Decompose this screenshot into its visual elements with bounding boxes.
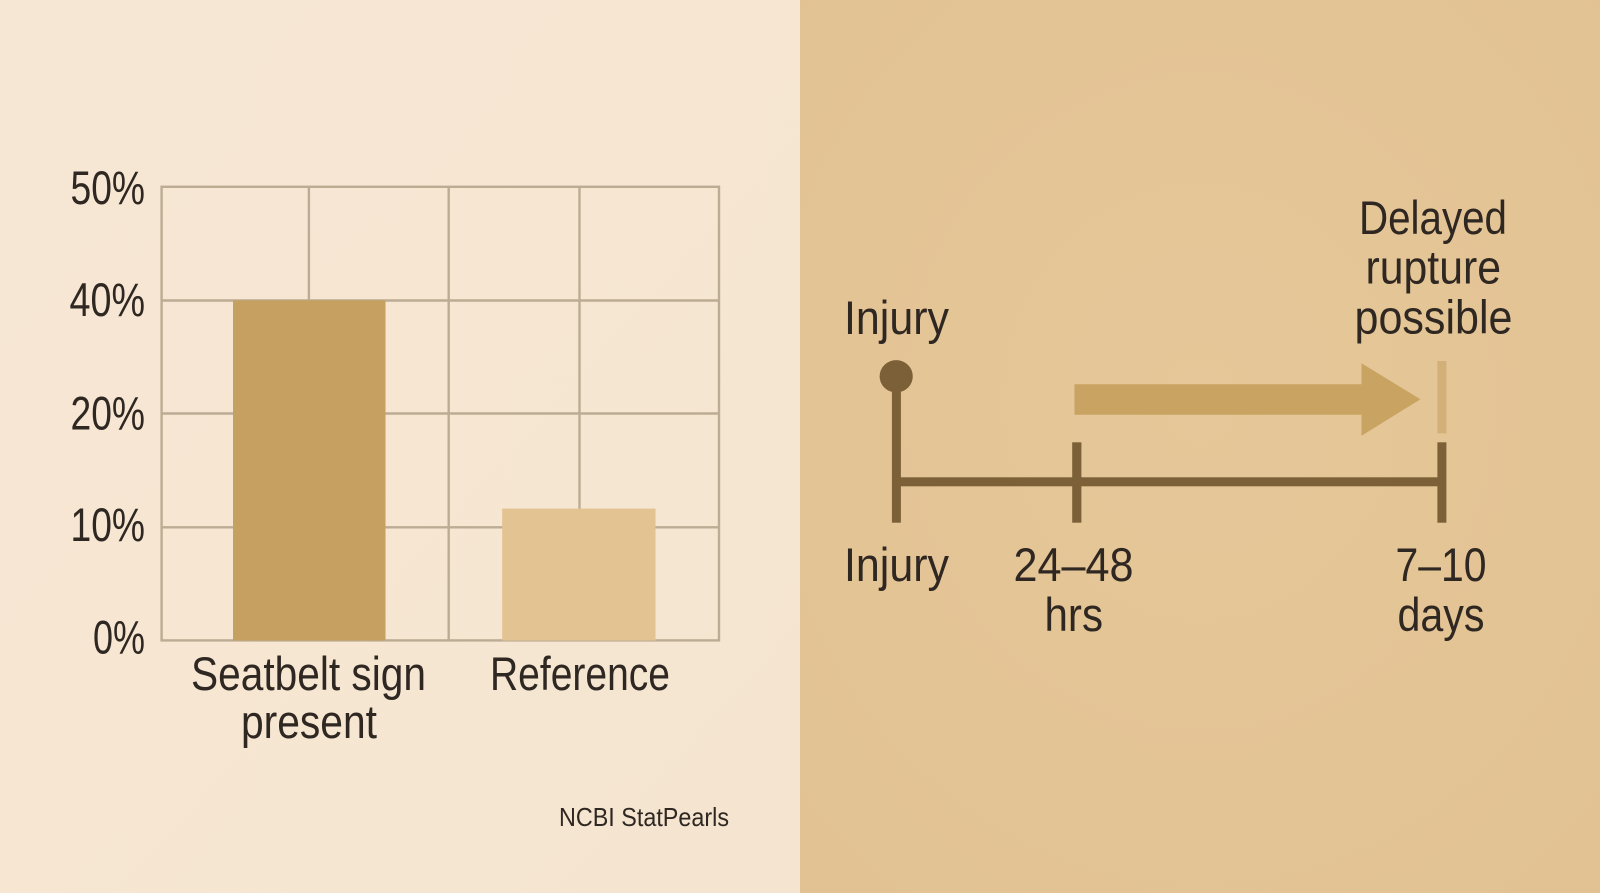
injury marker [880,360,913,523]
tick label: 7–10 days: days [1398,588,1484,641]
label: delayed rupture possible: Delayed [1359,191,1507,244]
timeline [844,191,1512,641]
arrow: window toward delayed rupture [1074,363,1420,436]
tick label: 7–10 days [1396,538,1486,641]
x axis label: seatbelt sign present: Seatbelt sign [191,647,426,700]
y axis labels [70,161,145,664]
y axis labels: 50% [70,161,145,214]
tick label: 24–48 hrs: 24–48 [1014,538,1134,591]
marker: delayed rupture [1437,361,1446,433]
label: delayed rupture possible: possible [1354,290,1512,344]
label: injury above: Injury [844,291,949,344]
label: delayed rupture possible: rupture [1366,240,1501,293]
x axis label: reference: Reference [490,647,670,700]
tick label: 24–48 hrs: hrs [1044,588,1103,641]
tick label: 24–48 hrs [1014,538,1134,641]
y axis labels: 0% [93,610,145,664]
tick label: injury: Injury [844,538,949,591]
bar: seatbelt sign present 40% [233,300,386,640]
bar chart [70,161,719,748]
y axis labels: 40% [70,273,145,326]
y axis labels: 20% [70,386,145,440]
timeline axis with ticks [896,442,1446,523]
label: delayed rupture possible [1354,191,1512,344]
source note: NCBI StatPearls [559,802,729,832]
panel: bar chart background [0,0,800,893]
panel: timeline background [800,0,1600,893]
x axis label: seatbelt sign present [191,647,426,748]
chart grid [162,187,719,640]
x axis label: seatbelt sign present: present [241,695,377,748]
bar: reference about 12% [502,509,656,640]
y axis labels: 10% [70,498,145,551]
tick label: 7–10 days: 7–10 [1396,538,1486,591]
